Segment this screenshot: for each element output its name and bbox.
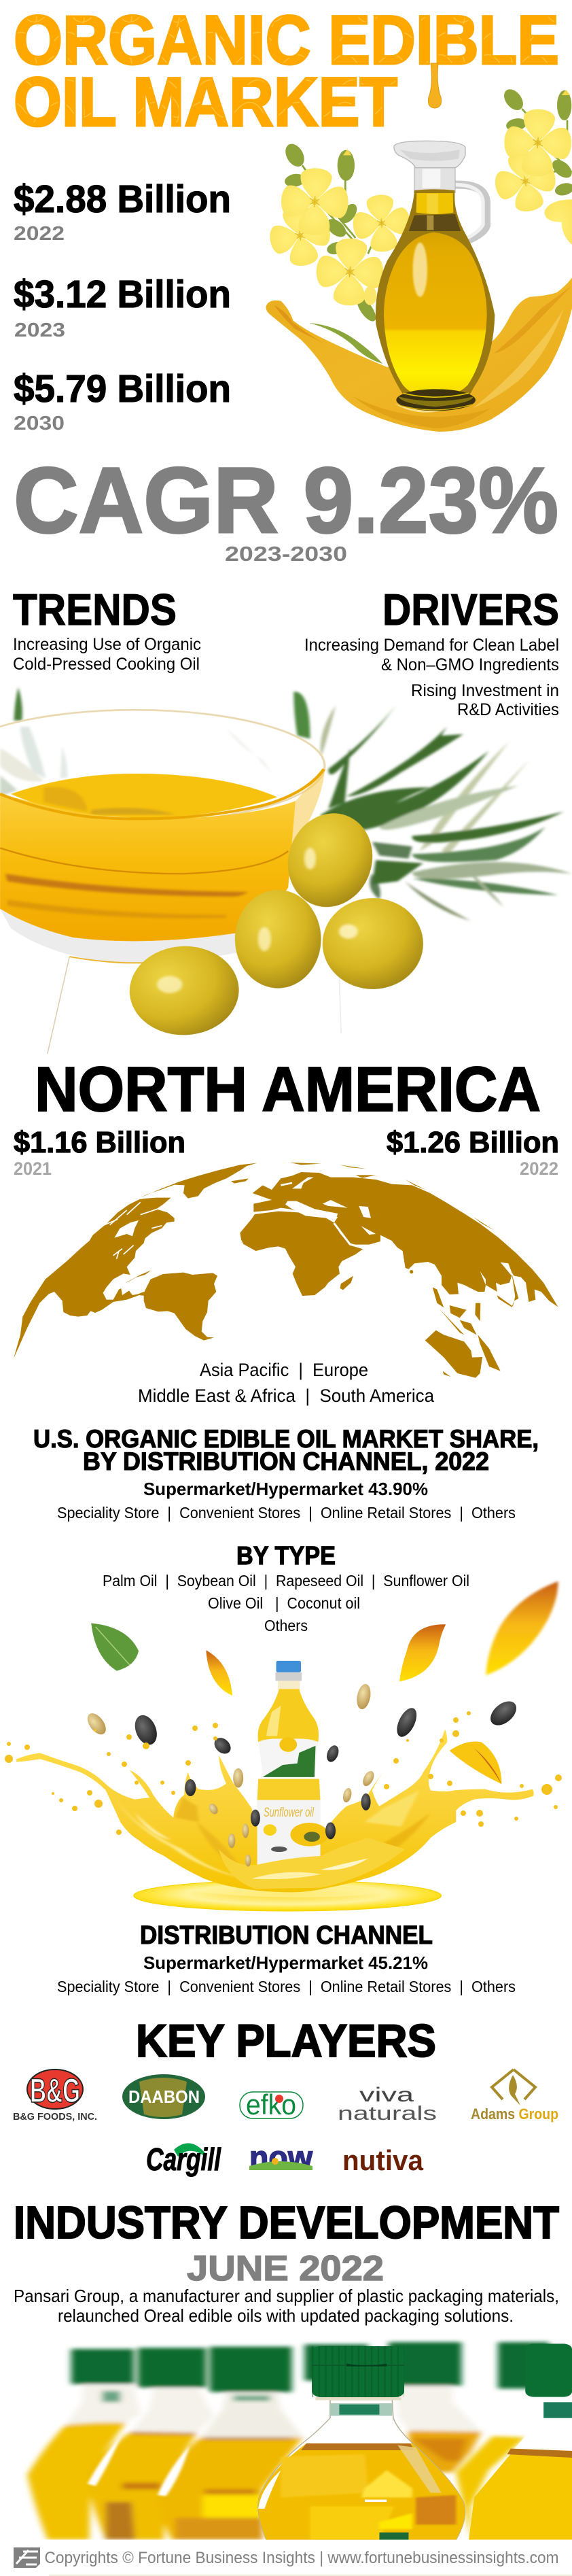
splash front — [219, 1838, 405, 1889]
stat: north america 2022 — [387, 1126, 559, 1179]
stat 2030: $5.79 Billion — [14, 367, 231, 411]
logo: nutiva: nutiva — [342, 2144, 424, 2176]
market value stats — [14, 177, 231, 434]
logo: NOW: now — [249, 2140, 313, 2176]
heading: trends: TRENDS — [13, 585, 177, 634]
logo: viva naturals: naturals — [338, 2103, 437, 2125]
leaf and petals — [91, 1581, 558, 1784]
splash and bottle — [16, 1729, 534, 1911]
front bottle — [258, 2346, 465, 2540]
CAGR heading: CAGR 9.23% — [14, 449, 558, 553]
stat 2023 — [14, 273, 231, 341]
icon: oil drop — [428, 63, 442, 108]
photo: oil bottles with green caps — [27, 2342, 572, 2540]
heading: distribution channel — [57, 1921, 516, 1995]
stat: north america 2021: 2021 — [14, 1158, 52, 1179]
logo: B&G Foods: B&G — [30, 2072, 80, 2110]
heading: US market share: Speciality Store | Convenient Stores | Online Retail Stores | Others — [57, 1504, 516, 1522]
stat: north america 2022: $1.26 Billion — [387, 1126, 559, 1159]
glass bowl — [0, 710, 325, 963]
icon: flower stems and buds left — [282, 141, 379, 324]
icon: yellow flowers left — [266, 166, 412, 308]
heading: drivers: R&D Activities — [457, 700, 559, 719]
icon: green pod — [309, 323, 382, 364]
front right bottle — [469, 2343, 572, 2540]
logo: Daabon: DAABON — [128, 2086, 200, 2107]
stat: north america 2021 — [14, 1126, 185, 1179]
board lines — [48, 957, 341, 1054]
map: americas — [14, 1163, 257, 1358]
text: other regions: Middle East & Africa | South America — [138, 1386, 435, 1406]
chart: world map — [14, 1163, 558, 1378]
text: other regions — [138, 1360, 435, 1406]
text: bottle label: Sunflower oil — [264, 1806, 315, 1820]
heading: distribution channel: DISTRIBUTION CHANNEL — [140, 1921, 433, 1950]
logo: Adams Group — [471, 2070, 558, 2123]
heading: by type — [103, 1542, 469, 1634]
puddle — [134, 1881, 441, 1911]
logo: viva naturals: viva — [359, 2084, 414, 2106]
heading: US market share: Supermarket/Hypermarket 43.90% — [143, 1479, 428, 1499]
back row bottles — [27, 2342, 549, 2540]
heading: distribution channel: Speciality Store | Convenient Stores | Online Retail Stores | Others — [57, 1978, 516, 1995]
heading: north america: NORTH AMERICA — [35, 1054, 541, 1124]
stat 2023: $3.12 Billion — [14, 273, 231, 316]
heading: trends: Increasing Use of Organic — [13, 635, 201, 654]
stat 2030 — [14, 367, 231, 434]
heading: industry development — [14, 2197, 559, 2288]
seeds — [84, 1683, 522, 1867]
heading: industry development: JUNE 2022 — [187, 2249, 384, 2288]
text: development description — [14, 2286, 559, 2326]
heading: by type: BY TYPE — [236, 1542, 336, 1570]
text: development description: relaunched Oreal edible oils with updated packaging solutions. — [58, 2305, 514, 2326]
stat: north america 2021: $1.16 Billion — [14, 1126, 185, 1159]
heading: drivers: Increasing Demand for Clean Label — [304, 636, 559, 655]
logo: efko: efko — [246, 2089, 296, 2120]
footer — [14, 2547, 558, 2568]
stat 2023: 2023 — [14, 320, 65, 341]
heading: US market share: BY DISTRIBUTION CHANNEL, 2022 — [83, 1447, 489, 1475]
stat: north america 2022: 2022 — [520, 1158, 558, 1179]
splash back — [16, 1729, 534, 1892]
logo: Daabon — [122, 2074, 205, 2119]
heading: US market share: U.S. ORGANIC EDIBLE OIL MARKET SHARE, — [33, 1425, 539, 1453]
heading: drivers: Rising Investment in — [411, 681, 559, 700]
stat 2022: 2022 — [14, 223, 65, 245]
map: eurasia africa australia — [240, 1163, 558, 1378]
olives — [118, 808, 423, 1045]
stat 2030: 2030 — [14, 413, 65, 434]
title: OIL MARKET — [14, 63, 397, 141]
logo: B&G Foods: B&G FOODS, INC. — [13, 2111, 97, 2123]
photo: olive oil bowl and olives — [0, 687, 572, 1054]
heading: US market share — [33, 1425, 539, 1522]
highlights on back bottles — [88, 2434, 190, 2496]
heading: by type: Others — [264, 1617, 308, 1634]
logo: Adams Group: Adams Group — [471, 2106, 558, 2123]
heading: by type: Palm Oil | Soybean Oil | Rapeseed Oil | Sunflower Oil — [103, 1572, 469, 1590]
icon: oil swoosh — [266, 277, 572, 432]
icon: oil jug — [376, 141, 495, 411]
illustration: oil jug with flowers and swoosh — [266, 86, 572, 432]
heading: trends: Cold-Pressed Cooking Oil — [13, 655, 200, 674]
CAGR heading: 2023-2030 — [225, 542, 347, 566]
logo: Cargill: Cargill — [146, 2142, 221, 2177]
title — [14, 1, 559, 141]
stat 2022: $2.88 Billion — [14, 177, 231, 221]
bottle upper — [258, 1661, 319, 1777]
icon: company logo — [14, 2547, 40, 2568]
droplets — [5, 1711, 562, 1835]
heading: by type: Olive Oil | Coconut oil — [208, 1594, 360, 1612]
heading: distribution channel: Supermarket/Hypermarket 45.21% — [143, 1953, 428, 1973]
heading: trends — [13, 585, 201, 674]
stat 2022 — [14, 177, 231, 245]
icon: flowers and buds right — [491, 86, 572, 245]
leaves — [0, 687, 572, 921]
logo: viva naturals — [338, 2084, 437, 2125]
logo: B&G Foods — [13, 2070, 97, 2123]
heading: drivers: & Non–GMO Ingredients — [381, 655, 559, 674]
bottle lower — [257, 1779, 328, 1866]
text: other regions: Asia Pacific | Europe — [200, 1360, 368, 1380]
heading: key players: KEY PLAYERS — [136, 2015, 436, 2067]
heading: drivers — [304, 585, 559, 719]
illustration: sunflower oil splash — [5, 1581, 562, 1911]
